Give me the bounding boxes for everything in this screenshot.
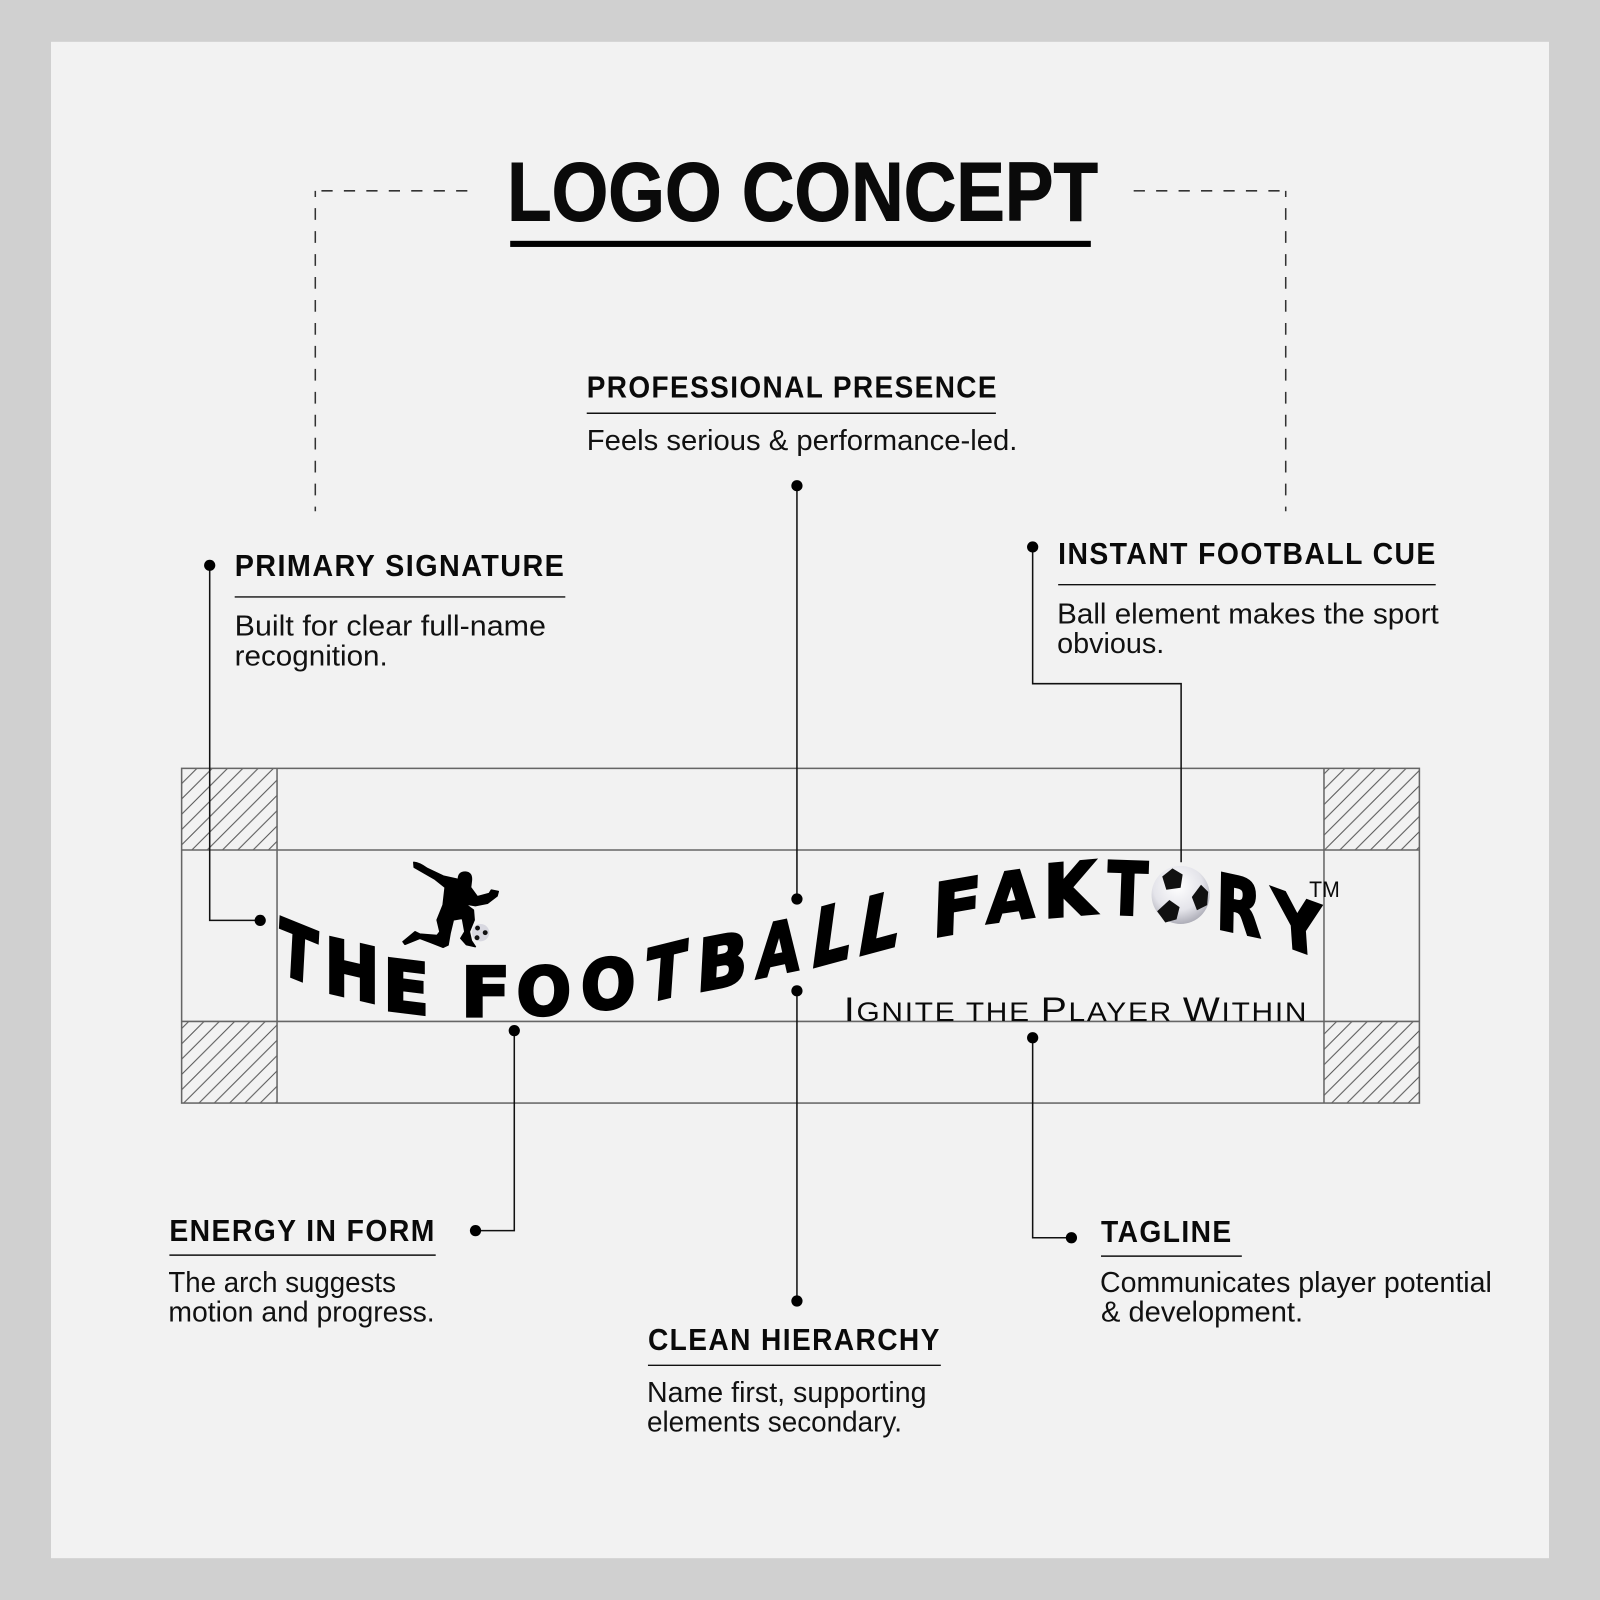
logo wordmark: A — [986, 856, 1036, 940]
callout: instant football cue: Ball element makes the sport — [1057, 598, 1439, 630]
icon: player silhouette — [403, 862, 498, 947]
logo wordmark: Y — [1270, 873, 1326, 978]
callout: clean hierarchy: CLEAN HIERARCHY — [648, 1323, 941, 1357]
logo wordmark: T — [1106, 846, 1149, 933]
connector: professional presence — [791, 480, 803, 905]
logo wordmark: A — [755, 904, 802, 996]
callout: clean hierarchy: Name first, supporting — [647, 1377, 927, 1409]
callout: energy in form: motion and progress. — [168, 1296, 435, 1328]
logo wordmark: T — [277, 902, 319, 1004]
logo wordmark: E — [383, 944, 429, 1033]
callout: energy in form: The arch suggests — [168, 1267, 396, 1299]
connector: tagline — [1027, 1032, 1077, 1243]
callout: clean hierarchy: elements secondary. — [647, 1407, 902, 1439]
callout: professional presence: Feels serious & performance-led. — [587, 425, 1017, 457]
logo wordmark: R — [1216, 859, 1262, 956]
callout: tagline: Communicates player potential — [1100, 1267, 1492, 1299]
logo wordmark: L — [852, 873, 908, 976]
tagline in logo: IGNITE THE PLAYER WITHIN — [844, 991, 1308, 1029]
logo wordmark: F — [931, 861, 983, 955]
connector: clean hierarchy — [791, 985, 803, 1307]
logo wordmark: H — [325, 921, 380, 1022]
callout: energy in form: ENERGY IN FORM — [169, 1214, 436, 1248]
callout: clean hierarchy — [647, 1323, 941, 1439]
callout: professional presence: PROFESSIONAL PRESENCE — [587, 370, 998, 404]
logo construction grid — [182, 768, 1419, 1103]
logo wordmark: O — [517, 953, 571, 1032]
logo wordmark — [277, 846, 1326, 1033]
logo wordmark: B — [695, 916, 750, 1010]
logo wordmark: F — [461, 952, 511, 1033]
trademark: TM — [1309, 877, 1340, 902]
callout: primary signature: Built for clear full-name — [235, 611, 546, 643]
callout: tagline — [1100, 1215, 1492, 1328]
callout: primary signature — [235, 549, 565, 672]
dashed title bracket — [315, 191, 1286, 511]
callout: primary signature: PRIMARY SIGNATURE — [235, 549, 565, 583]
icon: football replacing the letter O — [1152, 866, 1210, 924]
callout: primary signature: recognition. — [235, 640, 388, 672]
callout: professional presence — [587, 370, 1017, 457]
callout: energy in form — [168, 1214, 436, 1328]
callout: tagline: TAGLINE — [1101, 1215, 1233, 1249]
icon: small football — [472, 924, 489, 941]
callout: tagline: & development. — [1101, 1296, 1303, 1328]
connector: energy in form — [470, 1025, 520, 1236]
logo wordmark: K — [1044, 846, 1098, 935]
logo wordmark: T — [643, 924, 689, 1021]
logo wordmark: L — [806, 883, 858, 988]
logo wordmark: O — [581, 942, 635, 1027]
callout: instant football cue: obvious. — [1057, 628, 1164, 660]
connector: instant football cue — [1027, 541, 1181, 862]
callout: instant football cue: INSTANT FOOTBALL CUE — [1058, 537, 1437, 571]
connector: primary signature — [204, 560, 266, 926]
title: LOGO CONCEPT — [507, 144, 1098, 238]
callout: instant football cue — [1057, 537, 1439, 660]
